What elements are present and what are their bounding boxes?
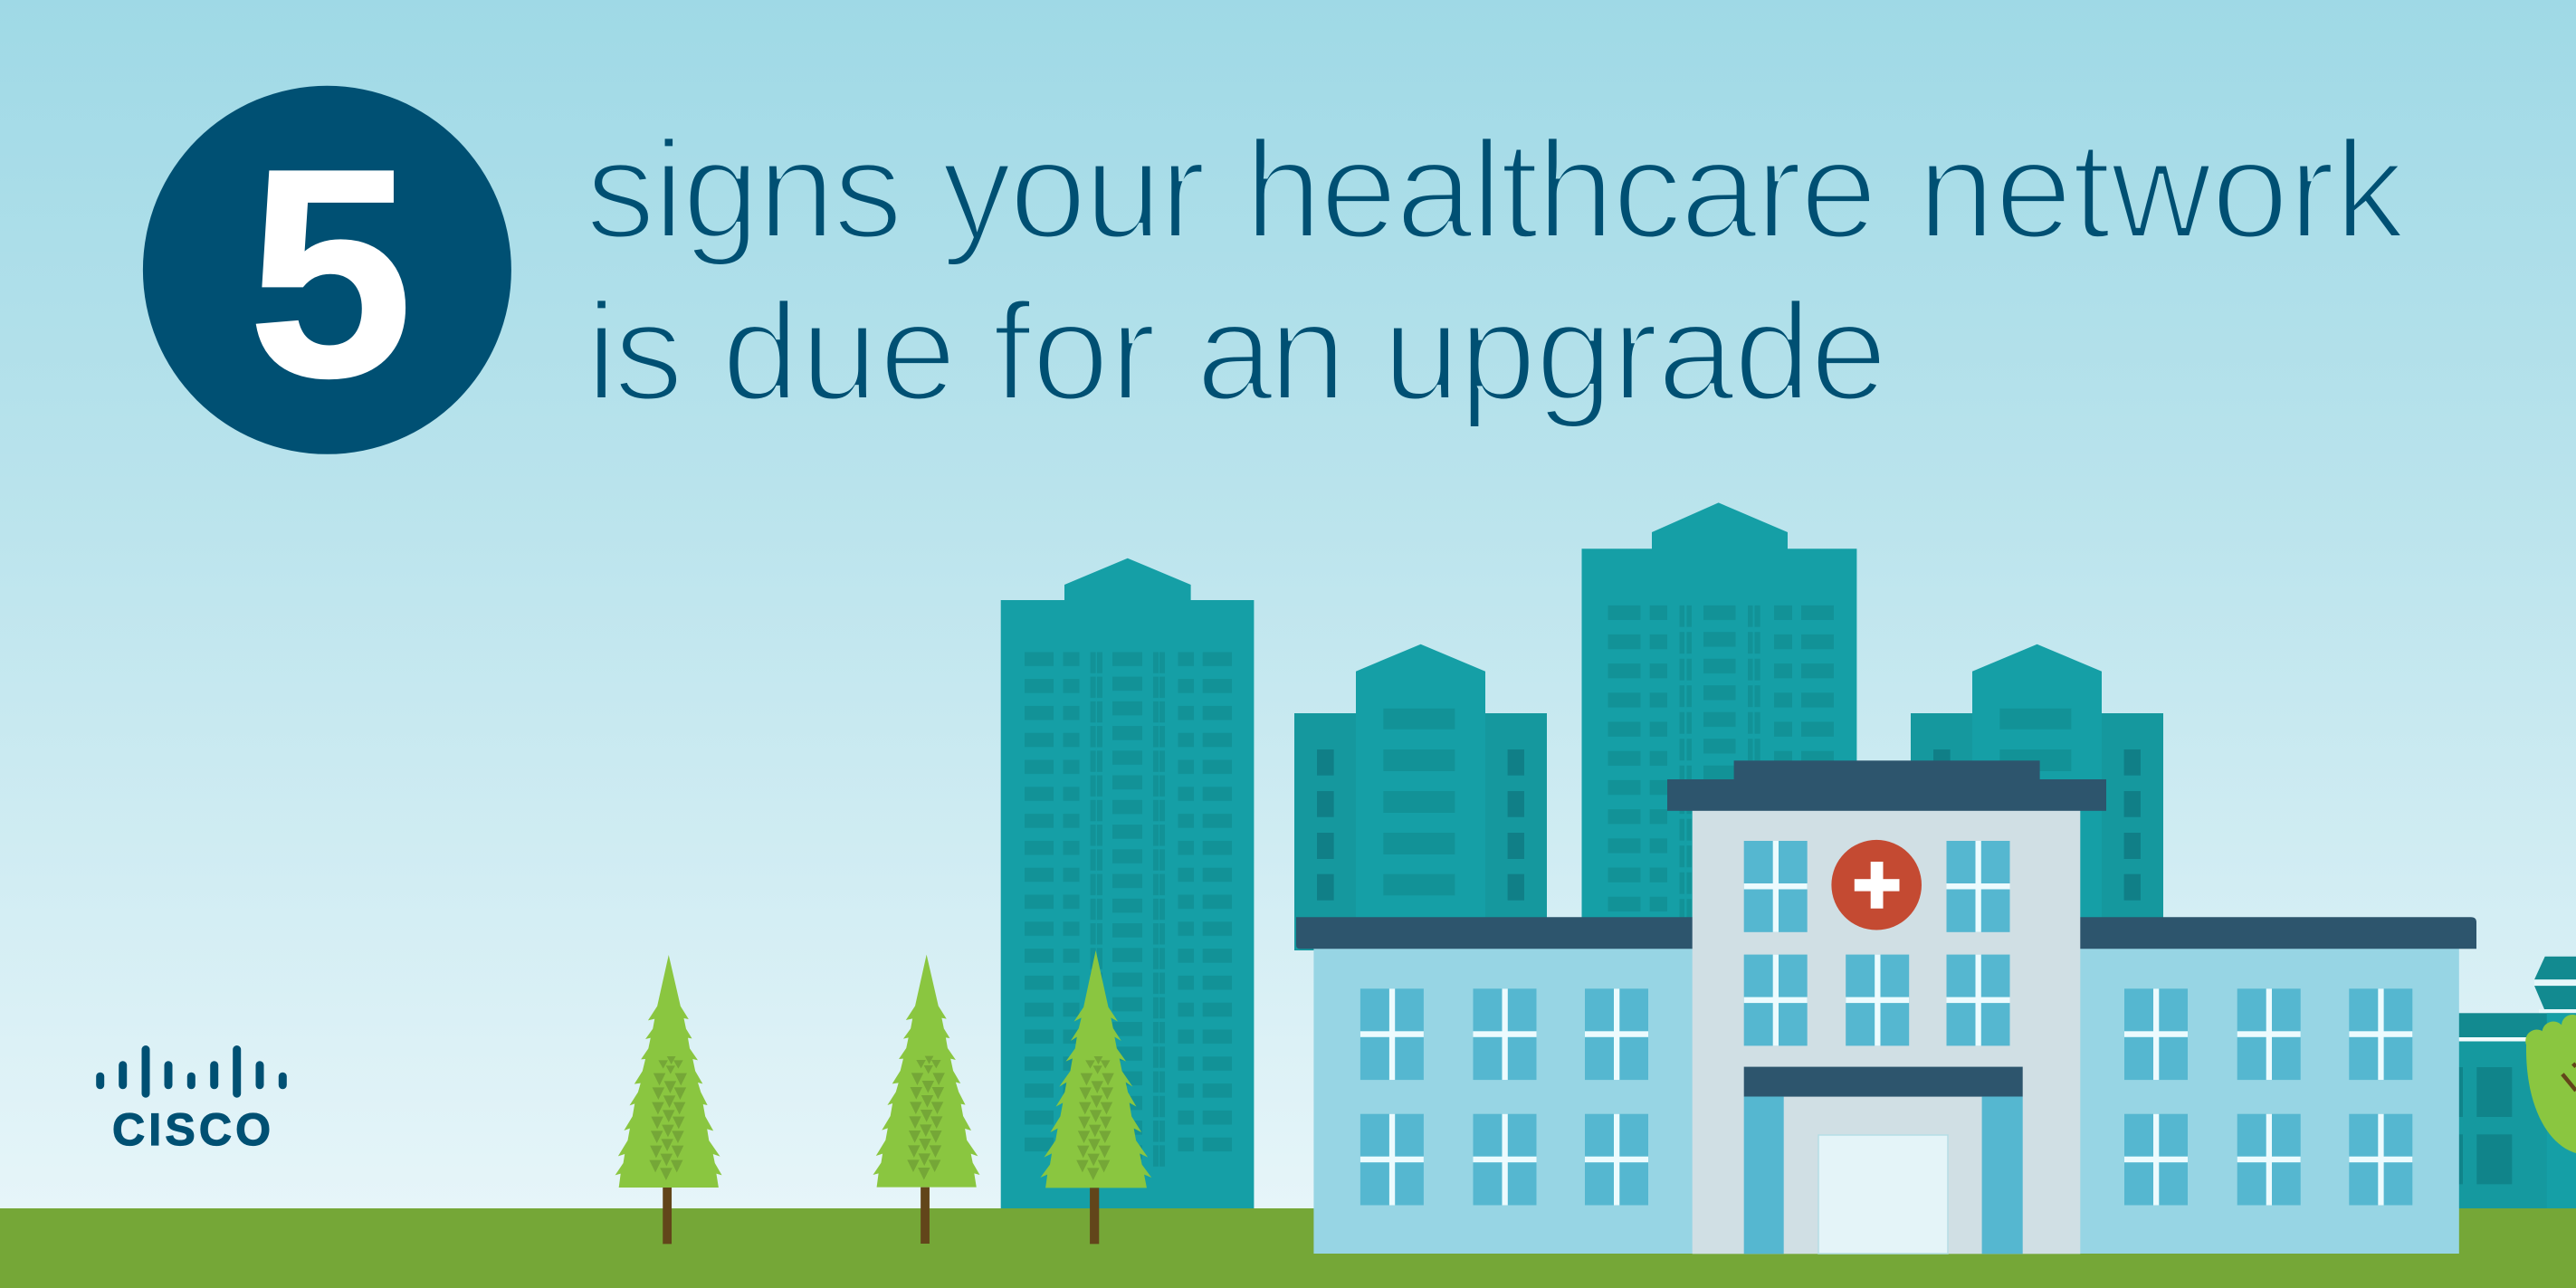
Cisco logo bbox=[96, 1045, 287, 1155]
right wing bbox=[2080, 917, 2476, 1254]
ground bbox=[0, 1208, 2576, 1288]
title: signs your healthcare network is due for an upgrade: signs bbox=[586, 112, 901, 268]
central block bbox=[1667, 760, 2106, 1254]
left wing bbox=[1296, 917, 1693, 1254]
title: signs your healthcare network is due for an upgrade bbox=[586, 112, 2406, 429]
title number badge: 5: 5 bbox=[248, 107, 413, 439]
hospital entrance bbox=[1744, 1067, 2023, 1254]
title: signs your healthcare network is due for an upgrade: healthcare bbox=[1245, 112, 1875, 268]
title: signs your healthcare network is due for an upgrade: for bbox=[992, 273, 1157, 429]
title: signs your healthcare network is due for an upgrade: your bbox=[942, 112, 1204, 268]
tower: short building behind left wing bbox=[1294, 644, 1547, 950]
title: signs your healthcare network is due for an upgrade: upgrade bbox=[1383, 273, 1886, 429]
title: signs your healthcare network is due for an upgrade: network bbox=[1917, 112, 2406, 268]
tree 2 bbox=[873, 955, 979, 1244]
title: signs your healthcare network is due for an upgrade: an bbox=[1196, 273, 1342, 429]
building at right edge bbox=[2458, 957, 2576, 1208]
tower: far left tall building bbox=[1001, 558, 1254, 1213]
Cisco logo: CISCO bbox=[112, 1104, 271, 1155]
title: signs your healthcare network is due for an upgrade: due bbox=[721, 273, 958, 429]
tower: short building behind right wing bbox=[1911, 644, 2163, 950]
title: signs your healthcare network is due for an upgrade: is bbox=[587, 273, 681, 429]
hospital bbox=[1296, 760, 2476, 1254]
tree 3 bbox=[1040, 950, 1151, 1244]
tree at right edge bbox=[2525, 1015, 2576, 1153]
icon: red cross sign bbox=[1831, 840, 1922, 930]
title number badge: 5 bbox=[143, 86, 511, 454]
tree 1 bbox=[615, 955, 722, 1244]
tower: central tallest building bbox=[1582, 502, 1856, 923]
